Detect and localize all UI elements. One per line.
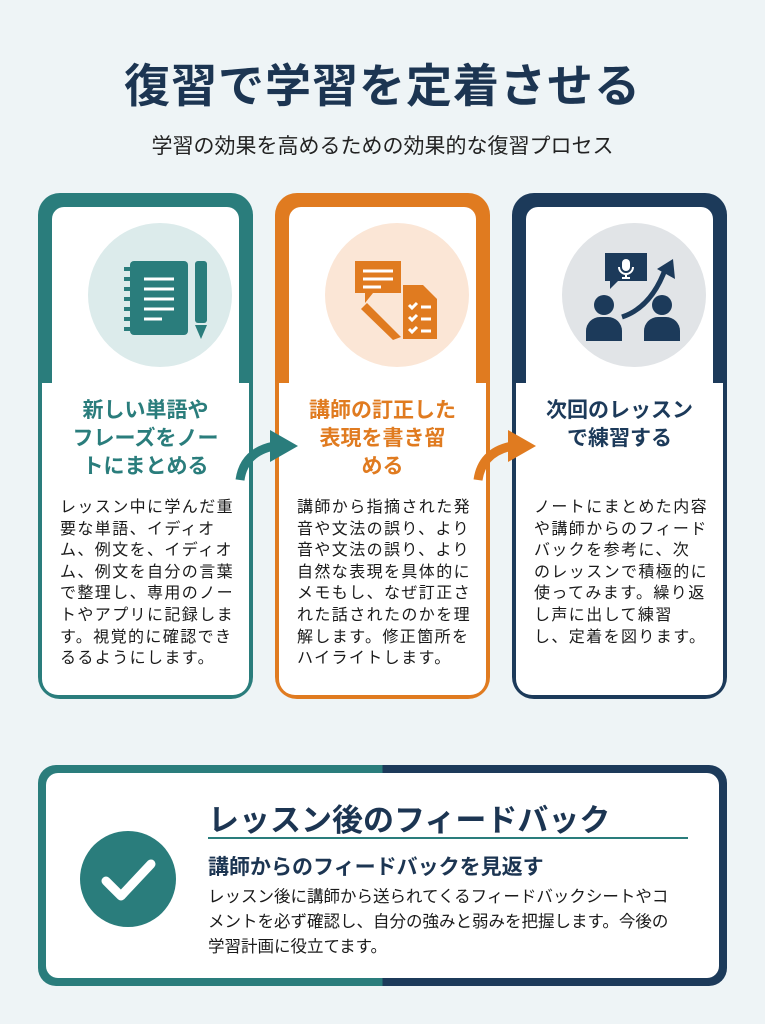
body text <box>297 498 471 667</box>
heading: フレーズをノー <box>73 427 218 450</box>
panel: card 1 <box>38 193 253 699</box>
body text: 学習計画に役立てます。 <box>208 938 387 956</box>
body text <box>534 498 708 646</box>
icon: check circle <box>80 831 176 927</box>
body text: トやアプリに記録しま <box>60 607 234 624</box>
body text <box>60 498 234 667</box>
title: 復習で学習を定着させる <box>124 60 641 112</box>
icon: speaking practice <box>562 223 706 367</box>
heading <box>546 399 693 450</box>
heading: で練習する <box>567 427 672 450</box>
icon: correction <box>325 223 469 367</box>
body text: バックを参考に、次 <box>534 542 690 559</box>
arrow: 2 to 3 <box>474 430 536 481</box>
body text: で整理し、専用のノー <box>60 585 234 602</box>
body text: ム、例文を、イディオ <box>60 542 233 559</box>
heading: 表現を書き留 <box>320 427 446 450</box>
body text: し声に出して練習 <box>534 607 673 624</box>
heading <box>309 398 456 478</box>
panel: card 3 <box>512 193 727 699</box>
body text: 音や文法の誤り、より <box>297 542 470 559</box>
body text: れた話されたのかを理 <box>297 607 471 624</box>
panel: feedback <box>38 765 727 986</box>
body text: 音や文法の誤り、より <box>297 521 470 538</box>
body text: ム、例文を自分の言葉 <box>60 564 234 581</box>
body text: レッスン中に学んだ重 <box>60 499 234 516</box>
body text: るるようにします。 <box>60 650 215 667</box>
body text: し、定着を図ります。 <box>534 629 706 646</box>
body text: ノートにまとめた内容 <box>534 499 708 516</box>
body text: メモもし、なぜ訂正さ <box>297 585 471 602</box>
body text: や講師からのフィード <box>534 521 708 538</box>
body text: 解します。修正箇所を <box>297 629 469 646</box>
heading: 次回のレッスン <box>546 399 693 422</box>
heading: レッスン後のフィードバック <box>208 803 610 838</box>
body text: 使ってみます。繰り返 <box>534 585 706 602</box>
body text: のレッスンで積極的に <box>534 564 708 581</box>
panel: card 2 <box>275 193 490 699</box>
heading: 新しい単語や <box>82 399 208 422</box>
body text: す。視覚的に確認でき <box>60 629 232 646</box>
heading: トにまとめる <box>82 455 208 478</box>
body text <box>208 888 668 956</box>
heading: める <box>362 455 404 478</box>
subtitle: 学習の効果を高めるための効果的な復習プロセス <box>152 135 614 158</box>
icon: notebook <box>88 223 232 367</box>
body text: メントを必ず確認し、自分の強みと弱みを把握します。今後の <box>208 913 668 931</box>
body text: ハイライトします。 <box>297 650 452 667</box>
heading: 講師の訂正した <box>309 399 456 422</box>
subheading: 講師からのフィードバックを見返す <box>208 856 544 879</box>
body text: 講師から指摘された発 <box>297 499 471 516</box>
body text: 要な単語、イディオ <box>60 521 215 538</box>
body text: レッスン後に講師から送られてくるフィードバックシートやコ <box>208 888 668 906</box>
body text: 自然な表現を具体的に <box>297 564 471 581</box>
arrow: 1 to 2 <box>236 430 298 481</box>
heading <box>73 398 218 478</box>
